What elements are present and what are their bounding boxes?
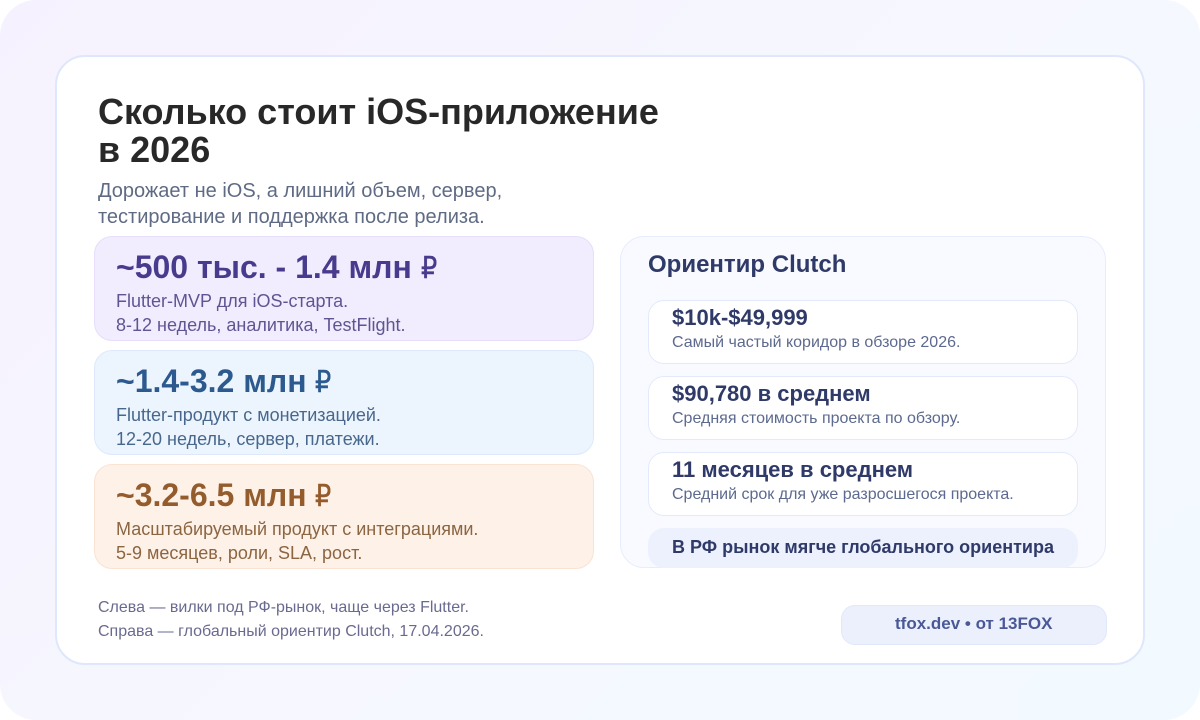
note pill	[648, 528, 1078, 568]
price range: ~3.2-6.5 млн	[116, 477, 307, 513]
tier card: monetization	[94, 350, 594, 455]
stat description: Самый частый коридор в обзоре 2026.	[672, 334, 960, 351]
stat card: average duration	[648, 452, 1078, 516]
description line 2: 8-12 недель, аналитика, TestFlight.	[116, 315, 406, 335]
price range: ~500 тыс. - 1.4 млн	[116, 249, 412, 285]
description line 1: Flutter-MVP для iOS-старта.	[116, 291, 348, 311]
subtitle	[98, 180, 502, 228]
tier card: MVP	[94, 236, 594, 341]
stat description: Средняя стоимость проекта по обзору.	[672, 410, 960, 427]
stat value: $10k-$49,999	[672, 305, 808, 330]
price range: ₽	[421, 252, 437, 285]
stat value: 11 месяцев в среднем	[672, 457, 913, 482]
stat card: corridor	[648, 300, 1078, 364]
description line 2: 5-9 месяцев, роли, SLA, рост.	[116, 543, 362, 563]
note text: В РФ рынок мягче глобального ориентира	[672, 537, 1054, 557]
price range: ₽	[315, 366, 332, 399]
subtitle: Дорожает не iOS, а лишний объем, сервер,	[98, 180, 502, 202]
footnote: Справа — глобальный ориентир Clutch, 17.04.2026.	[98, 623, 484, 640]
subtitle: тестирование и поддержка после релиза.	[98, 206, 485, 228]
brand badge	[841, 605, 1107, 645]
title	[98, 91, 659, 170]
stat card: average cost	[648, 376, 1078, 440]
price range: ₽	[315, 480, 332, 513]
panel heading: Ориентир Clutch	[648, 251, 846, 278]
price range: ~1.4-3.2 млн	[116, 363, 307, 399]
description line 2: 12-20 недель, сервер, платежи.	[116, 429, 380, 449]
title: Сколько стоит iOS-приложение	[98, 91, 659, 132]
description line 1: Масштабируемый продукт с интеграциями.	[116, 519, 478, 539]
brand text: tfox.dev • от 13FOX	[895, 614, 1052, 633]
tier card: scale	[94, 464, 594, 569]
footnote: Слева — вилки под РФ-рынок, чаще через Flutter.	[98, 599, 469, 616]
stat description: Средний срок для уже разросшегося проекта.	[672, 486, 1014, 503]
main card	[55, 55, 1145, 665]
panel: Clutch	[620, 236, 1106, 568]
description line 1: Flutter-продукт с монетизацией.	[116, 405, 381, 425]
footnote	[98, 599, 484, 640]
title: в 2026	[98, 129, 210, 170]
stat value: $90,780 в среднем	[672, 381, 871, 406]
